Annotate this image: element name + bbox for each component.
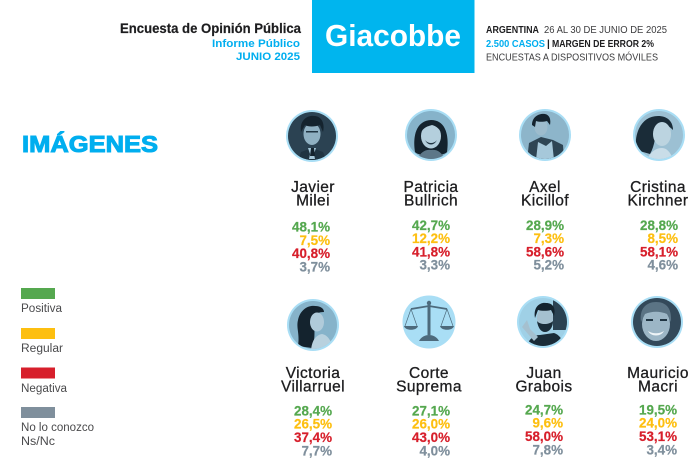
legend: negativa (21, 368, 68, 395)
percentages: 28,8% (640, 218, 678, 233)
percentages: 12,2% (412, 231, 450, 246)
card: Cristina Kirchner (628, 109, 688, 272)
header: survey details: 26 AL 30 DE JUNIO DE 2025 (544, 25, 667, 36)
card: Patricia Bullrich (404, 109, 458, 272)
percentages: 7,3% (533, 231, 564, 246)
card: Corte Suprema: Suprema (396, 378, 462, 396)
card: Corte Suprema (396, 296, 462, 458)
percentages: 28,9% (526, 218, 564, 233)
header: survey details: ENCUESTAS A DISPOSITIVOS MÓVILES (486, 50, 658, 64)
header: survey title block: Informe Público (212, 38, 300, 50)
header: survey details (486, 25, 667, 64)
name: Axel (529, 179, 561, 196)
card: Victoria Villarruel (281, 299, 345, 458)
header: Giacobbe logo box: Giacobbe (325, 18, 461, 53)
percentages (412, 404, 450, 458)
name: Victoria (286, 365, 340, 382)
portrait: Villarruel (287, 299, 339, 351)
percentages (292, 220, 330, 274)
percentages: 3,3% (419, 258, 450, 272)
percentages: 26,0% (412, 416, 450, 432)
portrait: Bullrich (405, 109, 457, 161)
card: Juan Grabois: Grabois (515, 378, 573, 396)
card: Axel Kicillof: Kicillof (521, 192, 569, 210)
percentages: 58,0% (525, 429, 563, 444)
percentages: 7,5% (299, 233, 330, 248)
name: Mauricio (627, 365, 689, 382)
legend: no lo conozco (21, 407, 94, 448)
name: Juan (526, 365, 562, 382)
percentages: 28,4% (294, 404, 332, 418)
legend: positiva (21, 288, 63, 315)
legend: no lo conozco: Ns/Nc (21, 436, 55, 448)
header: Giacobbe logo box (312, 0, 474, 73)
percentages: 27,1% (412, 404, 450, 418)
header: survey title block: JUNIO 2025 (236, 51, 300, 63)
legend: regular (21, 328, 63, 355)
portrait: Kirchner (633, 109, 685, 161)
percentages: 41,8% (412, 244, 450, 260)
legend: regular: Regular (21, 343, 63, 355)
name: Corte (409, 365, 449, 382)
percentages: 3,7% (299, 260, 330, 274)
name: Javier (291, 179, 335, 196)
portrait: Macri (631, 296, 683, 348)
card: Victoria Villarruel: Villarruel (281, 378, 345, 396)
percentages: 3,4% (646, 442, 677, 458)
card: Cristina Kirchner: Kirchner (628, 192, 688, 210)
percentages (525, 402, 563, 458)
header: survey details: 2.500 CASOS (486, 39, 545, 50)
portrait: Grabois (517, 296, 569, 350)
percentages: 24,7% (525, 402, 563, 418)
percentages: 58,6% (526, 244, 564, 260)
card: Javier Milei: Milei (296, 192, 330, 210)
legend: no lo conozco: No lo conozco (21, 422, 94, 434)
percentages (294, 404, 332, 458)
header: survey details: ARGENTINA (486, 25, 539, 36)
legend (21, 288, 94, 448)
section heading: Imágenes: IMÁGENES (22, 130, 158, 157)
icon: scales of justice (402, 296, 456, 348)
legend: positiva: Positiva (21, 303, 63, 315)
percentages (639, 402, 677, 458)
percentages (526, 218, 564, 272)
percentages: 7,8% (532, 442, 563, 458)
header: survey details: | (547, 39, 550, 50)
card: Mauricio Macri (627, 296, 689, 458)
percentages: 7,7% (301, 444, 332, 458)
percentages: 4,6% (647, 258, 678, 272)
header: survey title block (120, 21, 301, 63)
name: Patricia (404, 179, 458, 196)
portrait: Milei (286, 110, 338, 166)
percentages (412, 218, 450, 272)
card: Juan Grabois (515, 296, 573, 458)
percentages: 43,0% (412, 430, 450, 445)
header: survey title block: Encuesta de Opinión Pública (120, 21, 301, 36)
percentages: 58,1% (640, 244, 678, 260)
percentages: 8,5% (647, 231, 678, 246)
percentages: 48,1% (292, 220, 330, 234)
percentages: 37,4% (294, 430, 332, 445)
legend: negativa: Negativa (21, 383, 68, 395)
percentages: 26,5% (294, 416, 332, 432)
card: Javier Milei (286, 110, 338, 274)
name: Cristina (630, 179, 686, 196)
percentages: 4,0% (419, 444, 450, 458)
percentages: 9,6% (532, 416, 563, 430)
header: survey details: MARGEN DE ERROR 2% (552, 39, 654, 50)
percentages: 5,2% (533, 258, 564, 272)
percentages (640, 218, 678, 272)
percentages: 24,0% (639, 416, 677, 430)
percentages: 40,8% (292, 246, 330, 261)
percentages: 53,1% (639, 429, 677, 444)
portrait: Kicillof (519, 109, 571, 161)
percentages: 42,7% (412, 218, 450, 233)
card: Patricia Bullrich: Bullrich (404, 192, 458, 210)
percentages: 19,5% (639, 402, 677, 418)
card: Axel Kicillof (519, 109, 571, 272)
card: Mauricio Macri: Macri (638, 378, 678, 396)
